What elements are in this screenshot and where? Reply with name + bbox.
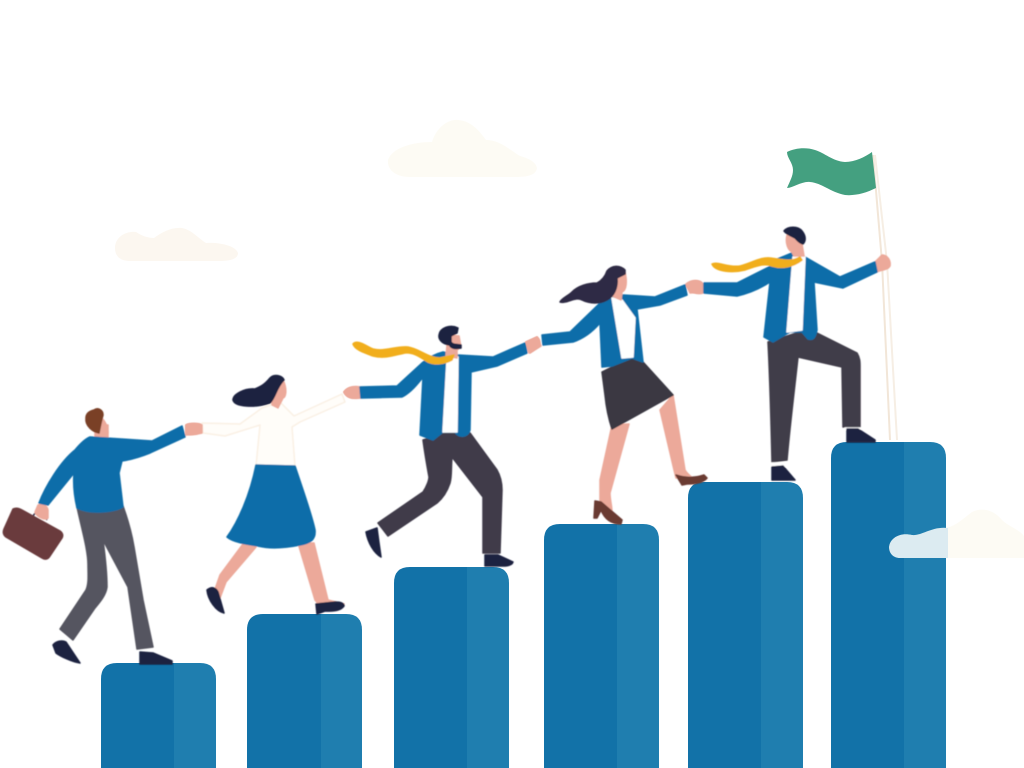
trousers: [60, 506, 153, 649]
person 2: woman in white blouse: [186, 376, 359, 614]
bar 1: [101, 663, 216, 768]
hands: [344, 337, 540, 398]
neck and face: [786, 235, 804, 256]
bar 6: [831, 442, 946, 768]
shirt: [612, 298, 635, 358]
shoes: [207, 588, 344, 614]
briefcase: [3, 508, 63, 559]
tie: [353, 342, 454, 364]
jacket: [704, 253, 877, 342]
shirt: [443, 357, 458, 432]
person 4: woman in dark skirt: [526, 266, 707, 524]
socks: [772, 428, 860, 466]
person 5: leader holding the flag: [687, 227, 890, 480]
hair: [560, 266, 625, 303]
hair: [784, 227, 805, 244]
cloud: top centre: [388, 120, 537, 177]
sweater: [39, 426, 185, 512]
skin: [35, 424, 202, 519]
blouse and arms: [202, 394, 345, 466]
bar 3: [394, 567, 509, 768]
neck and face: [446, 335, 461, 358]
shoes: [53, 641, 172, 664]
trousers: [768, 332, 860, 462]
jacket: [360, 343, 527, 440]
hair: [439, 326, 458, 345]
bar 4: [544, 524, 659, 768]
head: [612, 272, 626, 300]
bar 2: [247, 614, 362, 768]
bar 5: [688, 482, 803, 768]
skirt: [602, 357, 673, 429]
heels: [594, 475, 707, 524]
person 1: man with briefcase: [3, 409, 202, 664]
right hand on pole: [875, 255, 890, 272]
shoes: [366, 528, 513, 566]
jacket: [542, 285, 687, 367]
hands: [186, 388, 359, 434]
hair: [233, 376, 284, 406]
shirt: [787, 257, 805, 332]
legs: [214, 543, 344, 606]
hands: [526, 281, 702, 353]
trousers: [378, 430, 502, 553]
tie: [712, 257, 802, 272]
head: [272, 380, 286, 408]
left hand: [687, 281, 703, 294]
flag and pole: [787, 148, 897, 440]
cloud: left: [115, 228, 238, 261]
person 3: bearded man with yellow tie: [344, 326, 540, 566]
beard: [450, 342, 461, 349]
legs: [600, 395, 694, 512]
cloud: right, overlapping top bar: [889, 510, 1024, 558]
head and hair: [95, 416, 108, 436]
shoes: [772, 429, 875, 480]
skirt: [227, 465, 315, 548]
